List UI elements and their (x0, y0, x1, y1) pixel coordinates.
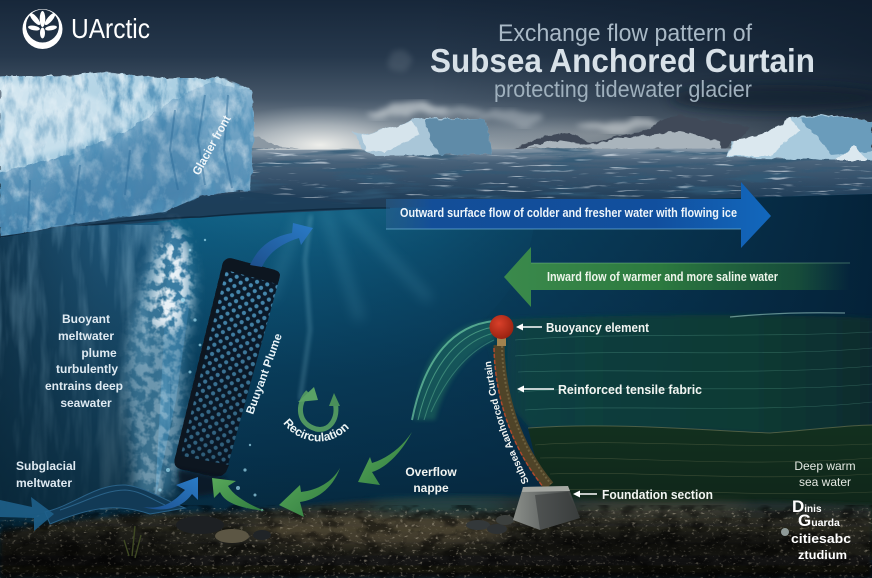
buoyant meltwater plume description: meltwater (58, 329, 114, 343)
surface flow arrow (386, 182, 771, 248)
overflow nappe label: Overflow (405, 465, 457, 479)
background: sea surface (0, 148, 872, 238)
deep warm sea water label: Deep warm (794, 459, 856, 473)
overflow nappe label: nappe (413, 481, 449, 495)
entrainment green arrow (212, 478, 265, 511)
distant iceberg left (352, 119, 492, 156)
glacier below water (0, 222, 190, 520)
buoyant meltwater plume description: plume (81, 346, 117, 360)
overflow arrow upper (358, 432, 412, 485)
foundation block (513, 486, 580, 530)
credits wordmark: citiesabc (791, 531, 851, 546)
buoyant meltwater plume description: entrains deep (45, 379, 123, 393)
logo mark (22, 9, 62, 49)
subglacial blue arrow into pipe (143, 477, 198, 509)
overflow mesh (412, 321, 494, 420)
inward flow label: Inward flow of warmer and more saline water (547, 269, 778, 284)
warm saline water zone (480, 313, 872, 560)
buoyancy callout: Buoyancy element (546, 320, 650, 335)
credits wordmark: Dinis (792, 497, 822, 516)
credits wordmark: ztudium (798, 548, 847, 562)
distant mountains (250, 115, 752, 150)
foundation callout: Foundation section (602, 487, 713, 502)
logo wordmark: UArctic (71, 13, 150, 44)
background: sky (0, 0, 872, 185)
subglacial meltwater flow (0, 485, 185, 531)
glacier above water (0, 70, 390, 240)
buoyant meltwater plume description: turbulently (56, 362, 118, 376)
fabric callout: Reinforced tensile fabric (558, 382, 702, 397)
title block: Exchange flow pattern of (498, 20, 752, 47)
surface flow label: Outward surface flow of colder and fresher water with flowing ice (400, 205, 737, 220)
buoyant meltwater plume description: seawater (60, 396, 112, 410)
deep warm sea water label (794, 459, 856, 489)
subglacial meltwater label: Subglacial (16, 459, 76, 473)
deep warm sea water label: sea water (799, 475, 851, 489)
overflow nappe label (405, 465, 457, 495)
subglacial meltwater label: meltwater (16, 476, 72, 490)
subglacial meltwater label (16, 459, 76, 490)
title block (430, 20, 815, 102)
curved blue arrow above pipe (250, 223, 313, 267)
meltwater plume (126, 222, 263, 511)
seabed (0, 496, 872, 578)
anchored curtain (494, 345, 551, 488)
glacier front label: Glacier front (189, 113, 234, 177)
buoyancy element (490, 315, 514, 346)
title block: protecting tidewater glacier (494, 76, 752, 102)
credits wordmark (781, 497, 851, 562)
overflow arrow lower (279, 468, 340, 517)
perforated buoyant plume pipe (174, 258, 280, 496)
buoyant meltwater plume description: Buoyant (62, 312, 110, 326)
title block: Subsea Anchored Curtain (430, 42, 815, 79)
buoyant meltwater plume description (45, 312, 123, 410)
recirculation arrows (298, 387, 340, 429)
inward flow arrow (504, 247, 850, 307)
recirculation label: Recirculation (284, 418, 349, 442)
curtain rotated label: Subsea Aanhorced Curtain (484, 361, 528, 484)
UArctic logo (22, 9, 150, 49)
credits wordmark: Guarda (798, 511, 840, 530)
distant iceberg right (726, 115, 872, 160)
buoyant plume label: Buuyant Plume (245, 332, 285, 416)
underwater background (0, 194, 872, 534)
